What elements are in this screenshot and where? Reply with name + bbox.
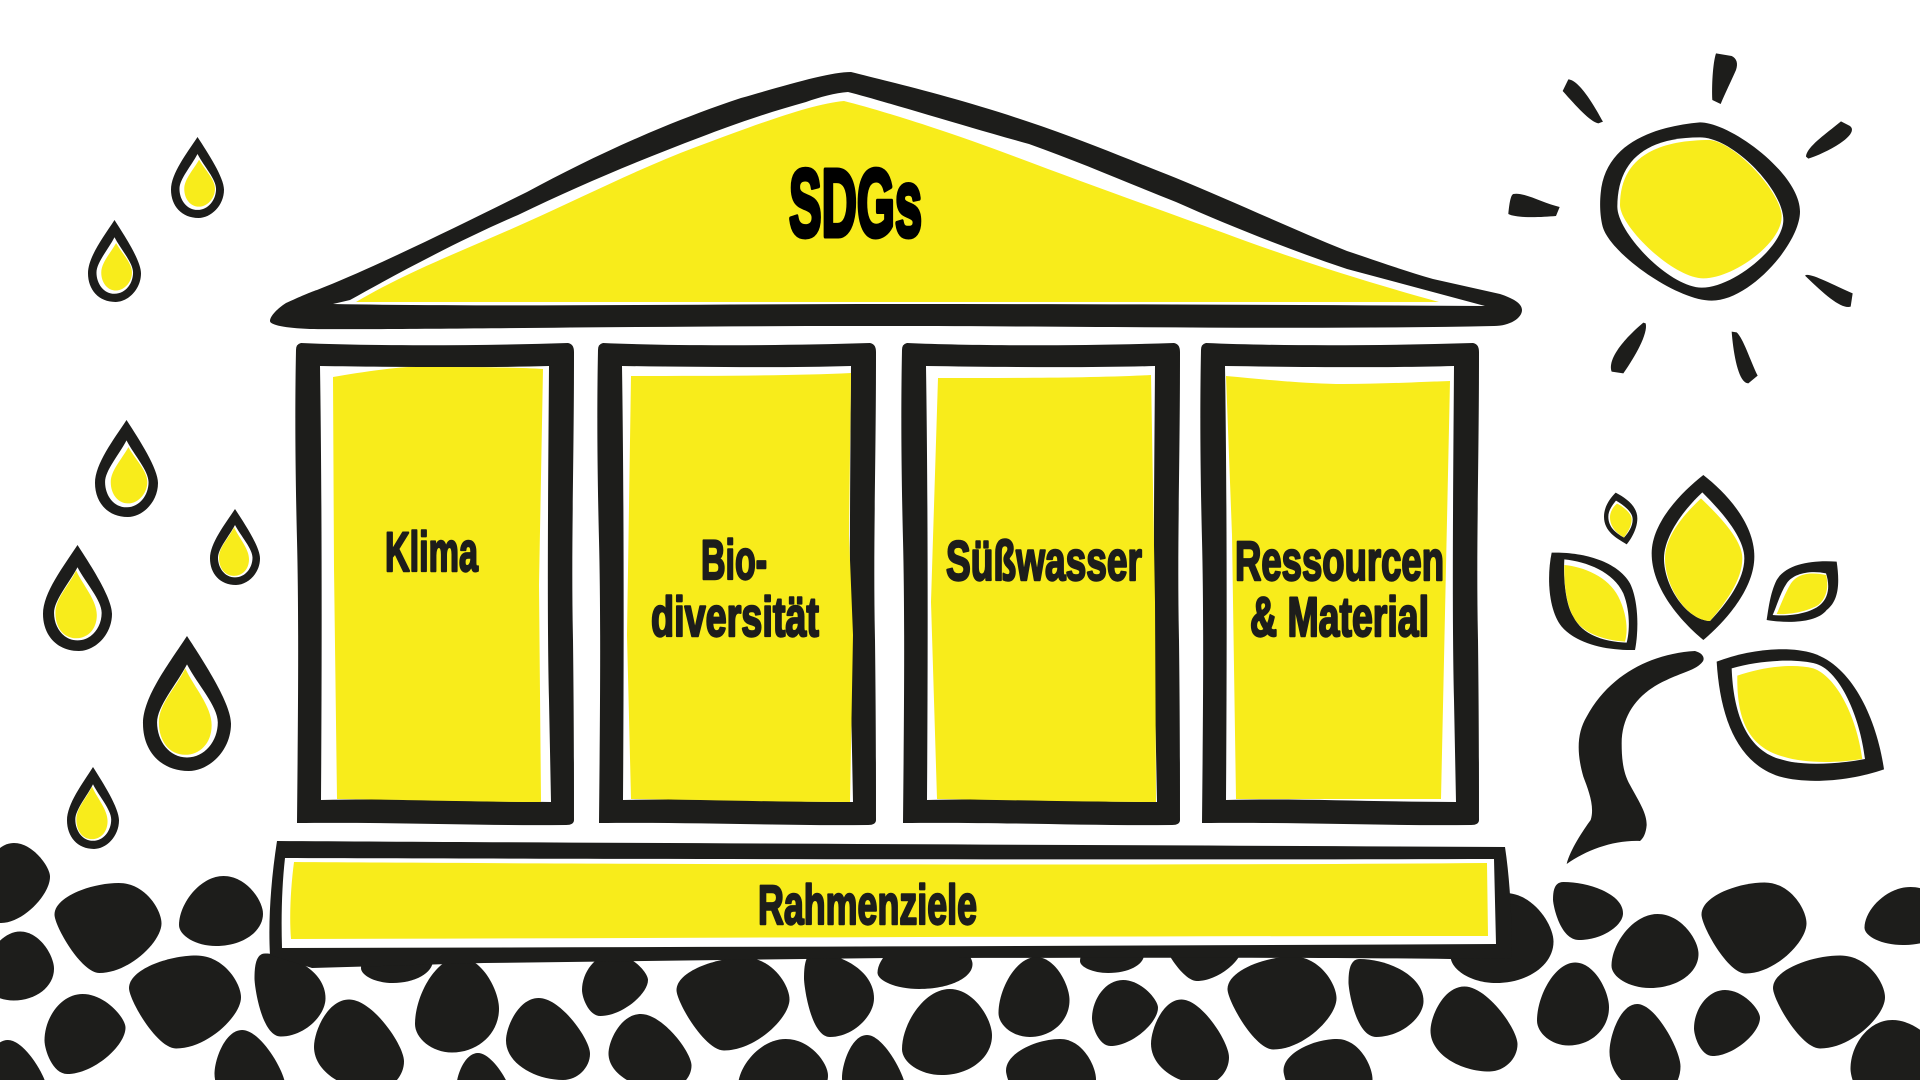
heading: SDGs: SDGs bbox=[789, 150, 922, 257]
water drops bbox=[43, 137, 260, 849]
pillar: Biodiversität bbox=[597, 343, 876, 825]
icon: sun bbox=[1508, 53, 1853, 383]
label: Ressourcen: Ressourcen bbox=[1235, 529, 1444, 592]
label: & Material: & Material bbox=[1250, 585, 1429, 648]
label: Bio-: Bio- bbox=[701, 528, 767, 591]
pillar: Klima bbox=[295, 343, 574, 825]
pebbles ground bbox=[0, 843, 1920, 1080]
temple roof bbox=[270, 72, 1522, 329]
label: diversität: diversität bbox=[651, 585, 819, 648]
label: Süßwasser: Süßwasser bbox=[946, 529, 1142, 592]
pillar: Süßwasser bbox=[901, 343, 1180, 825]
temple base: Rahmenziele bbox=[269, 841, 1512, 968]
label: Klima: Klima bbox=[385, 520, 479, 583]
pillar: Ressourcen & Material bbox=[1200, 343, 1479, 825]
icon: tree with leaves bbox=[1549, 475, 1884, 864]
label: Rahmenziele: Rahmenziele bbox=[758, 873, 977, 936]
